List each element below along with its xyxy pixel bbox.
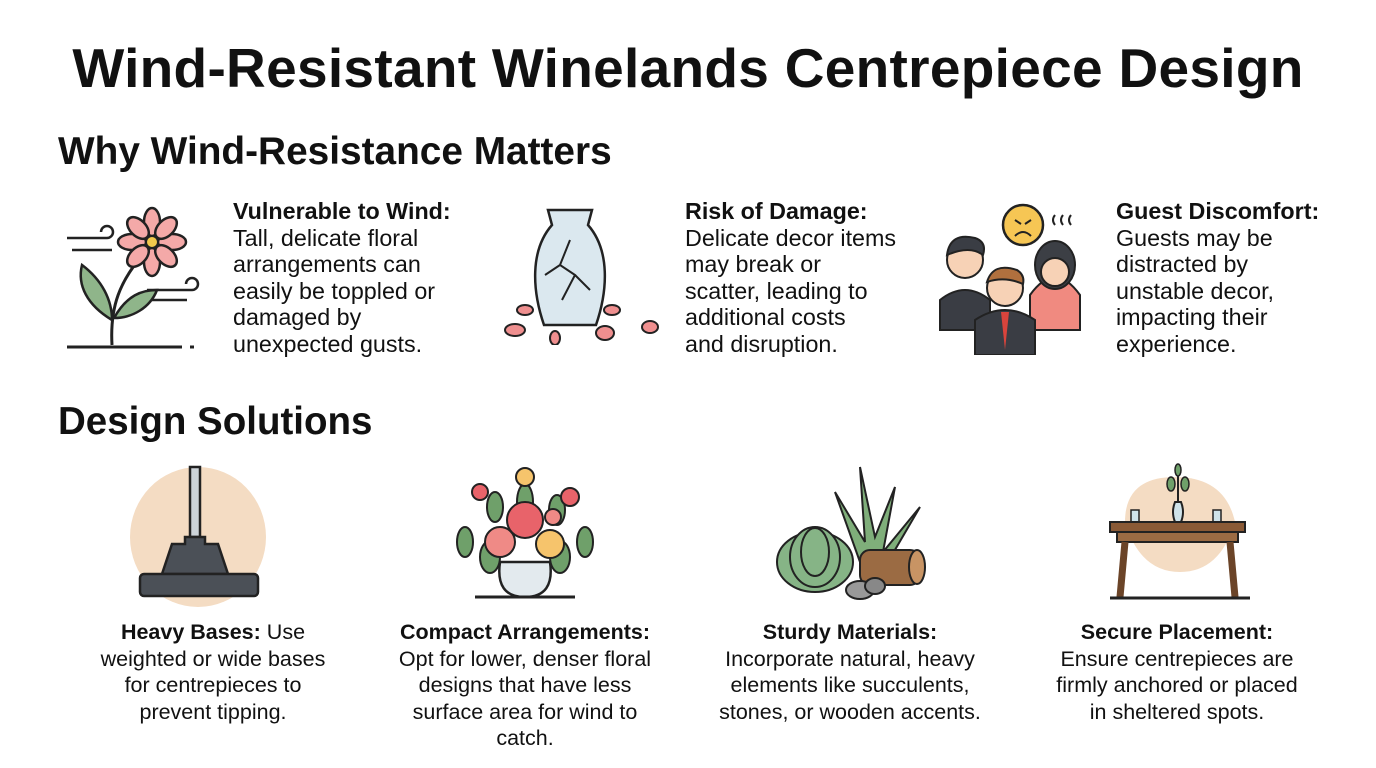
text: heavy bases: weighted or wide bases (101, 646, 325, 670)
text: heavy bases: Heavy Bases: Use (121, 620, 305, 644)
text: vulnerable to wind: damaged by (233, 304, 361, 330)
text: sturdy materials: Incorporate natural, heavy (725, 646, 975, 670)
icon: sturdy materials (776, 466, 926, 600)
icon: heavy base (130, 466, 266, 607)
text: compact arrangements: Opt for lower, denser floral (399, 646, 651, 670)
icon: flower in wind (67, 206, 200, 348)
text: sturdy materials: stones, or wooden accents. (719, 700, 981, 724)
text: heavy bases: prevent tipping. (139, 700, 286, 724)
heading: design solutions: Design Solutions (58, 400, 372, 443)
text: risk of damage (685, 198, 896, 357)
text: secure placement (1056, 620, 1298, 724)
text: sturdy materials: Sturdy Materials: (763, 620, 937, 644)
text: risk of damage: additional costs (685, 304, 846, 330)
icon: broken vase (504, 208, 659, 345)
text: vulnerable to wind: unexpected gusts. (233, 330, 422, 356)
text: secure placement: firmly anchored or placed (1056, 673, 1298, 697)
text: guest discomfort: impacting their (1116, 304, 1268, 330)
text: guest discomfort: distracted by (1116, 251, 1248, 277)
text: risk of damage: may break or (685, 251, 821, 277)
text: heavy bases: for centrepieces to (125, 673, 301, 697)
text: vulnerable to wind: Vulnerable to Wind: (233, 198, 451, 224)
text: sturdy materials (719, 620, 981, 724)
text: compact arrangements: surface area for wind to (413, 700, 637, 724)
text: compact arrangements: designs that have less (419, 673, 631, 697)
text: vulnerable to wind: arrangements can (233, 251, 421, 277)
title: Wind-Resistant Winelands Centrepiece Design (72, 37, 1304, 99)
icon: uncomfortable guests (939, 204, 1081, 355)
text: vulnerable to wind: Tall, delicate floral (233, 224, 418, 250)
text: risk of damage: Risk of Damage: (685, 198, 868, 224)
text: secure placement: Ensure centrepieces are (1060, 646, 1294, 670)
text: risk of damage: and disruption. (685, 330, 838, 356)
text: risk of damage: Delicate decor items (685, 224, 896, 250)
text: vulnerable to wind (233, 198, 451, 357)
text: vulnerable to wind: easily be toppled or (233, 278, 435, 304)
text: guest discomfort: experience. (1116, 330, 1236, 356)
text: guest discomfort: Guest Discomfort: (1116, 198, 1319, 224)
text: compact arrangements (399, 620, 651, 750)
text: risk of damage: scatter, leading to (685, 278, 868, 304)
text: heavy bases (100, 620, 325, 724)
icon: secure placement table (1109, 463, 1250, 600)
text: guest discomfort (1116, 198, 1319, 357)
text: compact arrangements: catch. (496, 726, 554, 750)
text: compact arrangements: Compact Arrangements: (400, 620, 650, 644)
text: guest discomfort: unstable decor, (1116, 278, 1274, 304)
heading: why wind-resistance matters: Why Wind-Resistance Matters (58, 130, 612, 173)
text: secure placement: Secure Placement: (1081, 620, 1273, 644)
text: sturdy materials: elements like succulents, (730, 673, 970, 697)
icon: compact arrangement (456, 467, 594, 598)
text: guest discomfort: Guests may be (1116, 224, 1273, 250)
text: secure placement: in sheltered spots. (1090, 700, 1264, 724)
